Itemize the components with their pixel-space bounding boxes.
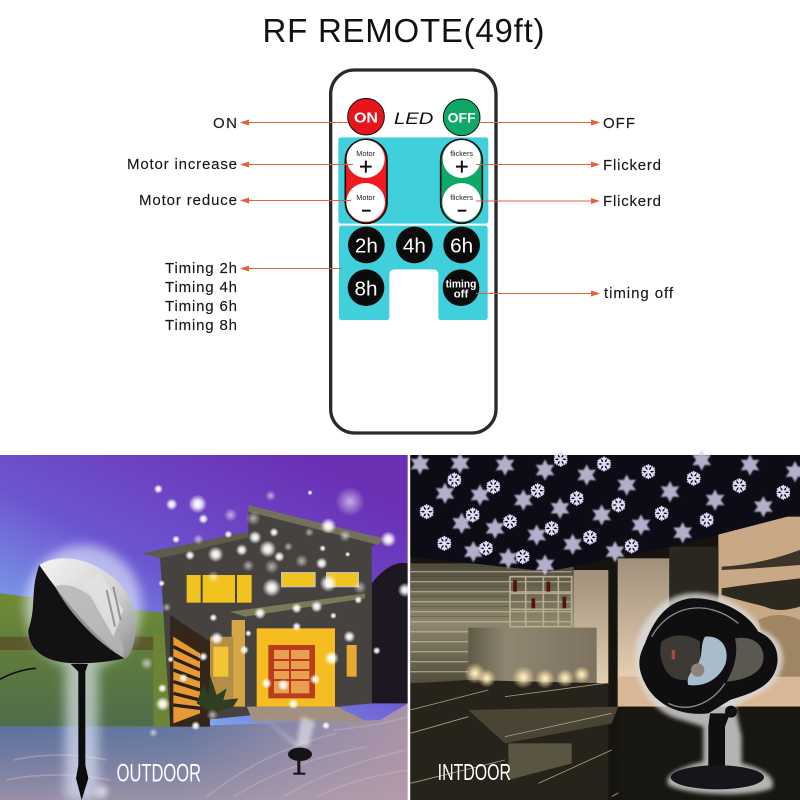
button: 4h — [396, 227, 433, 263]
mural wall — [718, 517, 800, 703]
button: ON: ON — [354, 110, 378, 126]
motor rocker — [345, 139, 387, 223]
panel: indoor photo — [408, 449, 800, 800]
arrow: timing off — [476, 290, 600, 296]
button: 6h — [443, 227, 480, 263]
button: 2h — [348, 227, 385, 263]
label: ON: ON — [213, 115, 237, 132]
dark pillar — [669, 547, 718, 680]
label: INTDOOR: INTDOOR — [438, 759, 511, 785]
indoor projector — [639, 598, 778, 789]
wood slats — [173, 637, 200, 723]
button: 6h: 6h — [450, 235, 473, 258]
LED label: LED — [394, 109, 433, 128]
wine shelves — [510, 577, 572, 627]
brick wall — [410, 563, 574, 683]
label: Timing list: Timing 2h — [165, 260, 237, 277]
label: Flickerd upper: Flickerd — [603, 157, 661, 174]
dome lens — [660, 635, 700, 680]
palm trees — [372, 563, 408, 703]
label: Motor reduce: Motor reduce — [139, 192, 237, 209]
base — [671, 765, 764, 789]
arrow: Flickerd lower — [476, 198, 600, 204]
motor rocker: Motor — [356, 193, 376, 202]
button: timing off — [443, 269, 479, 306]
left divider edge — [408, 450, 410, 800]
inner lens ring — [55, 585, 124, 657]
label: Flickerd lower: Flickerd — [603, 193, 661, 210]
remote body — [331, 70, 496, 433]
dark base — [410, 455, 800, 800]
ground stake — [71, 664, 88, 800]
button: timing off: timing — [446, 278, 476, 290]
counter lights — [464, 663, 590, 689]
projector glow — [635, 593, 783, 794]
lit corridor floor — [618, 677, 800, 707]
button: ON — [348, 98, 384, 135]
panel: remote control — [331, 70, 496, 433]
teal key panel: lower — [339, 226, 488, 320]
flickers rocker — [441, 139, 482, 223]
arrow: Timing — [240, 266, 342, 272]
label: Timing list: Timing 6h — [165, 298, 237, 315]
arrow: Motor reduce — [240, 198, 351, 204]
sky — [0, 455, 408, 800]
snowflake projection: flakes — [421, 453, 789, 563]
snow particles — [92, 484, 412, 800]
flickers rocker: flickers — [450, 193, 473, 202]
arrow: Flickerd upper — [476, 162, 600, 168]
panel: outdoor photo — [0, 455, 412, 800]
small projector — [288, 748, 312, 775]
label: Timing list: Timing 8h — [165, 317, 237, 334]
marble floor — [410, 680, 800, 800]
projector dome — [39, 558, 136, 658]
label: Timing list: Timing 4h — [165, 279, 237, 296]
shrubs and path — [197, 675, 367, 722]
power cable — [0, 668, 36, 679]
lit entry — [257, 628, 357, 707]
flickers rocker: flickers — [450, 149, 473, 158]
projection beams — [260, 715, 315, 747]
ground — [0, 703, 408, 800]
teal key panel: upper — [338, 137, 488, 224]
button: 2h: 2h — [355, 235, 378, 258]
lit upper windows — [187, 573, 358, 603]
label: Timing list — [165, 260, 237, 334]
label: timing off: timing off — [604, 285, 674, 302]
button: OFF: OFF — [448, 110, 476, 126]
snowflake projection: stars — [411, 449, 800, 576]
projector body — [28, 565, 124, 663]
projector housing — [639, 598, 778, 714]
title: RF REMOTE(49ft) — [262, 12, 544, 49]
motor rocker: Motor — [356, 149, 376, 158]
large garden projector — [0, 558, 136, 800]
ceiling — [410, 455, 800, 572]
button: 8h: 8h — [355, 277, 377, 300]
arrow: OFF — [478, 120, 600, 126]
button: 4h: 4h — [403, 235, 426, 258]
bright doorway — [618, 558, 669, 678]
button: 8h — [348, 269, 384, 306]
stand — [708, 713, 730, 770]
arrow: ON — [240, 120, 348, 126]
button: timing off: off — [454, 288, 468, 300]
rear room — [572, 570, 608, 685]
bar counter — [468, 628, 597, 683]
button: OFF — [443, 99, 480, 136]
side lens — [727, 638, 764, 682]
label: Motor increase: Motor increase — [127, 156, 237, 173]
label: OUTDOOR: OUTDOOR — [117, 759, 201, 787]
house — [142, 505, 383, 727]
arrow: Motor increase — [240, 162, 353, 168]
label: OFF: OFF — [603, 115, 635, 132]
green garage — [0, 593, 177, 727]
projector glow — [25, 545, 142, 800]
